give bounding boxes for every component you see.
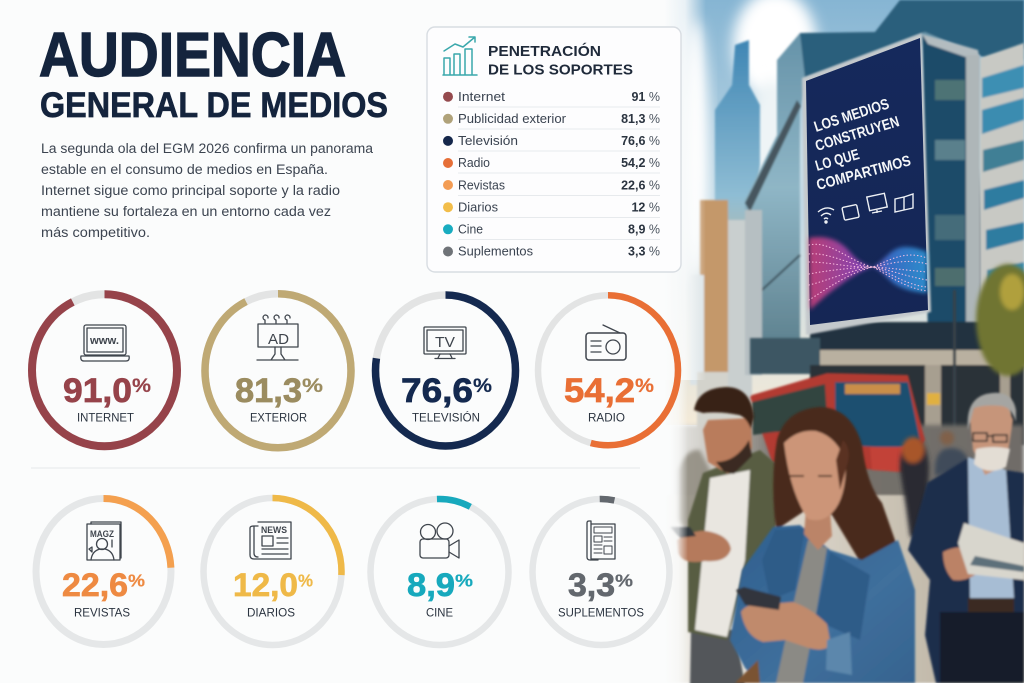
- value: 12,0: [233, 567, 298, 603]
- background pedestrians: [678, 431, 971, 550]
- value: [568, 567, 634, 603]
- value: 3,3: [568, 567, 615, 603]
- panel heading: [488, 42, 633, 78]
- row: Revistas: [443, 178, 660, 192]
- right concrete building with windows: [980, 43, 1024, 310]
- woman with denim jacket and smartphone: [730, 407, 915, 683]
- value: %: [132, 376, 151, 397]
- row: Televisión: 76,6 %: [621, 134, 660, 148]
- panel heading: DE LOS SOPORTES: [488, 62, 633, 78]
- billboard slogan: LOS MEDIOS: [812, 96, 891, 136]
- ring: diarios 12,0%: [204, 498, 342, 645]
- icon: AD billboard: AD: [268, 332, 289, 348]
- row: Suplementos: [443, 244, 660, 258]
- icon: laptop www: www.: [89, 335, 119, 347]
- row: Cine: 8,9 %: [628, 222, 660, 236]
- icon: newspaper: [250, 522, 291, 559]
- value: %: [473, 376, 492, 397]
- value: 76,6: [401, 372, 473, 410]
- value: 91,0: [63, 372, 132, 410]
- label: INTERNET: [77, 412, 134, 424]
- title: GENERAL DE MEDIOS: [40, 86, 388, 125]
- ring: revistas 22,6%: [36, 498, 171, 644]
- row: Publicidad exterior: 81,3 %: [621, 112, 660, 126]
- label: SUPLEMENTOS: [558, 608, 644, 620]
- left fade of photo, lower part: [664, 380, 688, 683]
- value: %: [635, 376, 654, 397]
- billboard data wave: [809, 237, 927, 310]
- row: Internet: 91 %: [631, 90, 660, 104]
- icon: radio: [586, 325, 626, 360]
- icon: laptop www: [81, 325, 129, 361]
- icon: magazine: MAGZ: [90, 529, 114, 539]
- billboard slogan: [812, 96, 913, 194]
- value: 81,3: [235, 372, 302, 410]
- intro paragraph: mantiene su fortaleza en un entorno cada vez: [41, 204, 331, 219]
- ring: cine 8,9%: [368, 497, 511, 647]
- row: Radio: [443, 156, 660, 170]
- panel white margin: [650, 0, 665, 683]
- icon: magazine: [87, 522, 121, 560]
- row: Radio: Radio: [458, 156, 490, 170]
- intro paragraph: más competitivo.: [41, 225, 150, 240]
- photo: city street with billboard and people: [650, 0, 1024, 683]
- icon: AD billboard: [257, 315, 298, 360]
- label: CINE: [426, 608, 453, 620]
- row: Revistas: Revistas: [458, 178, 505, 192]
- icon: rising bar chart: [443, 37, 477, 75]
- value: %: [615, 570, 634, 590]
- left fade of photo, upper part: [664, 0, 706, 380]
- label: EXTERIOR: [250, 412, 307, 424]
- row: Publicidad exterior: Publicidad exterior: [458, 112, 566, 126]
- sky and clouds: [660, 0, 1024, 425]
- row: Internet: [443, 90, 660, 104]
- intro paragraph: Internet sigue como principal soporte y la radio: [41, 183, 340, 198]
- intro paragraph: estable en el consumo de medios en España.: [41, 162, 328, 177]
- value: %: [302, 376, 323, 397]
- billboard slogan: CONSTRUYEN: [813, 113, 901, 155]
- value: 8,9: [407, 567, 455, 603]
- label: TELEVISIÓN: [412, 412, 480, 424]
- red double-decker bus: [750, 373, 925, 472]
- glass office building behind billboard: [745, 0, 1024, 375]
- icon: film camera: [420, 523, 459, 558]
- row: Cine: Cine: [458, 222, 483, 236]
- tree: [976, 264, 1024, 376]
- distant skyscraper: [690, 40, 760, 432]
- value: %: [128, 570, 145, 590]
- icon: TV: TV: [435, 335, 455, 351]
- ring: televisión 76,6%: [376, 295, 516, 446]
- value: %: [298, 570, 313, 590]
- row: Cine: [443, 222, 660, 236]
- billboard slogan: LO QUE: [813, 146, 861, 175]
- row: Diarios: 12 %: [631, 200, 660, 214]
- ring: suplementos 3,3%: [531, 498, 671, 646]
- man with smartphone: [670, 387, 783, 683]
- intro paragraph: [41, 141, 373, 240]
- value: %: [455, 570, 474, 590]
- value: 22,6: [62, 567, 128, 603]
- corner glass tower: [922, 34, 986, 345]
- street level facade: [750, 290, 1024, 445]
- billboard: [802, 33, 931, 335]
- ring: radio 54,2%: [538, 295, 678, 445]
- panel: penetración de los soportes: [427, 27, 681, 272]
- divider between ring rows: [31, 467, 640, 469]
- value: [407, 567, 474, 603]
- man in suit reading newspaper: [908, 393, 1024, 683]
- title: AUDIENCIA: [39, 21, 346, 90]
- intro paragraph: La segunda ola del EGM 2026 confirma un panorama: [41, 141, 373, 156]
- row: Revistas: 22,6 %: [621, 178, 660, 192]
- row: Televisión: Televisión: [458, 134, 518, 148]
- label: REVISTAS: [74, 608, 130, 620]
- row: Internet: Internet: [458, 90, 506, 104]
- billboard icons: [818, 193, 913, 223]
- icon: TV: [424, 327, 466, 358]
- row: Radio: 54,2 %: [621, 156, 660, 170]
- billboard slogan: COMPARTIMOS: [815, 152, 913, 194]
- label: DIARIOS: [247, 608, 295, 620]
- ring: internet 91,0%: [32, 294, 177, 446]
- label: RADIO: [588, 412, 625, 424]
- ring: exterior 81,3%: [205, 294, 351, 448]
- pavement: [660, 495, 1024, 683]
- row: Suplementos: Suplementos: [458, 244, 533, 258]
- street backdrop: [672, 425, 1024, 505]
- row: Suplementos: 3,3 %: [628, 244, 660, 258]
- value: 54,2: [564, 372, 635, 410]
- icon: supplement pages: [587, 521, 615, 560]
- row: Televisión: [443, 134, 660, 148]
- icon: newspaper: NEWS: [261, 525, 287, 535]
- title: [39, 21, 388, 125]
- panel heading: PENETRACIÓN: [488, 42, 601, 60]
- row separators: [458, 107, 660, 240]
- row: Diarios: [443, 200, 660, 214]
- row: Diarios: Diarios: [458, 200, 498, 214]
- row: Publicidad exterior: [443, 112, 660, 126]
